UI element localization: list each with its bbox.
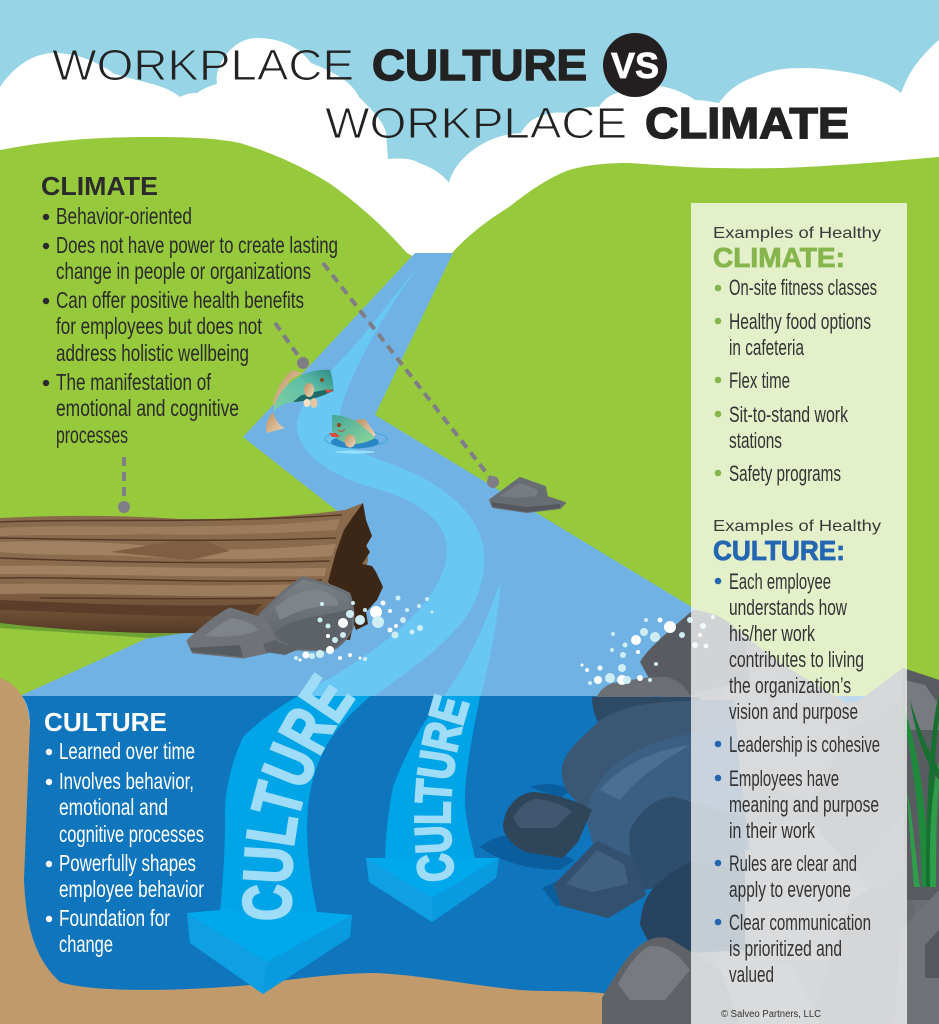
climate bullets — [43, 203, 338, 448]
dashed leader: to log — [118, 457, 130, 513]
culture bullets: Involves behavior, — [59, 768, 194, 794]
culture examples list: is prioritized and — [729, 936, 842, 961]
examples of healthy climate heading: CLIMATE: — [713, 242, 845, 273]
sky background — [0, 0, 939, 300]
small stream rock — [490, 478, 565, 512]
grey rock mass — [660, 610, 939, 1024]
climate examples list: in cafeteria — [729, 335, 805, 360]
dashed leader: to rock — [323, 263, 499, 488]
culture examples list: understands how — [729, 595, 847, 620]
grass — [900, 693, 939, 887]
culture examples list: his/her work — [729, 621, 816, 646]
culture bullets: employee behavior — [59, 876, 204, 902]
left hill — [0, 137, 420, 700]
culture bullets: Foundation for — [59, 905, 170, 931]
culture examples list: in their work — [729, 818, 816, 843]
swimming fish — [325, 415, 387, 454]
splash at rocks — [580, 615, 715, 685]
arrow: large culture arrow — [187, 672, 370, 994]
examples of healthy culture heading: CULTURE: — [713, 535, 845, 566]
deep water shadows — [480, 784, 575, 906]
bottom grey rock — [602, 937, 740, 1024]
right edge rocks — [903, 668, 939, 900]
culture heading: CULTURE — [44, 707, 167, 737]
culture examples list — [715, 569, 880, 987]
climate examples list: Sit-to-stand work — [729, 402, 849, 427]
title line 1: CULTURE — [372, 41, 587, 90]
examples of healthy culture heading — [713, 518, 881, 566]
title line 2: CLIMATE — [645, 99, 849, 148]
upper grey rock — [640, 610, 750, 695]
culture examples list: vision and purpose — [729, 699, 858, 724]
splash at log — [294, 596, 434, 662]
climate examples list — [715, 275, 877, 486]
sand — [0, 678, 939, 1024]
stream: main current — [290, 262, 484, 700]
climate text block — [41, 171, 338, 448]
culture bullets: emotional and — [59, 794, 168, 820]
deep water — [22, 696, 939, 1000]
title — [52, 33, 849, 148]
river — [22, 253, 720, 720]
climate bullets: The manifestation of — [56, 369, 211, 395]
culture bullets: change — [59, 931, 113, 957]
climate bullets: for employees but does not — [56, 313, 262, 339]
arrow: small culture arrow — [366, 694, 499, 922]
vs badge: VS — [611, 45, 659, 86]
title line 1: WORKPLACE — [52, 41, 354, 90]
climate bullets: Does not have power to create lasting — [56, 232, 338, 258]
climate heading: CLIMATE — [41, 171, 158, 201]
culture examples list: apply to everyone — [729, 877, 851, 902]
title line 2: WORKPLACE — [325, 99, 627, 148]
title line 2 — [325, 99, 849, 148]
culture bullets: Powerfully shapes — [59, 850, 196, 876]
culture examples list: Rules are clear and — [729, 851, 857, 876]
arrow label: culture: CULTURE — [414, 694, 470, 882]
log broken end — [328, 503, 383, 630]
culture examples list: valued — [729, 962, 774, 987]
vs badge — [603, 33, 667, 97]
culture bullets: Learned over time — [59, 738, 195, 764]
climate examples list: stations — [729, 428, 782, 453]
copyright: © Salveo Partners, LLC — [721, 1009, 821, 1020]
examples of healthy culture heading: Examples of Healthy — [713, 518, 881, 535]
climate examples list: Healthy food options — [729, 309, 871, 334]
examples of healthy climate heading: Examples of Healthy — [713, 225, 881, 242]
climate examples list: Flex time — [729, 368, 790, 393]
culture text block — [44, 707, 204, 957]
culture bullets — [46, 738, 204, 957]
dashed leader: to fish — [275, 323, 309, 369]
climate bullets: processes — [56, 422, 128, 448]
culture examples list: contributes to living — [729, 647, 864, 672]
culture examples list: the organization’s — [729, 673, 851, 698]
climate bullets: emotional and cognitive — [56, 395, 239, 421]
culture bullets: cognitive processes — [59, 821, 204, 847]
culture examples list: Employees have — [729, 766, 839, 791]
panel: examples — [691, 203, 907, 1024]
jumping fish — [266, 370, 334, 433]
rock pile — [503, 610, 939, 1024]
log — [0, 503, 368, 640]
arrow label: culture: CULTURE — [242, 672, 356, 920]
climate examples list: Safety programs — [729, 461, 841, 486]
examples of healthy climate heading — [713, 225, 881, 273]
climate bullets: Behavior-oriented — [56, 203, 192, 229]
dark blue boulders — [592, 697, 700, 725]
climate bullets: change in people or organizations — [56, 258, 311, 284]
culture examples list: meaning and purpose — [729, 792, 879, 817]
climate bullets: address holistic wellbeing — [56, 340, 249, 366]
culture examples list: Each employee — [729, 569, 831, 594]
rocks by the log — [188, 578, 353, 657]
culture examples list: Clear communication — [729, 910, 871, 935]
stream: second current — [441, 580, 501, 700]
climate bullets: Can offer positive health benefits — [56, 287, 304, 313]
title line 1 — [52, 41, 587, 90]
clouds — [0, 38, 939, 300]
right hill — [370, 157, 939, 760]
